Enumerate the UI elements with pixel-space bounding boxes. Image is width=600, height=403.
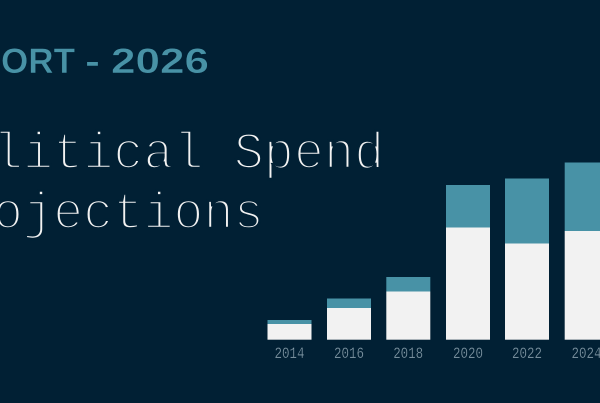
bar 2014 [268,320,312,340]
heading: report year [0,42,209,81]
bar 2024 [565,162,600,340]
axis labels: years: 2020 [453,345,483,363]
axis labels: years: 2018 [393,345,423,363]
heading: report year: - [85,42,100,81]
title [0,125,384,244]
axis labels: years: 2016 [334,345,364,363]
bar chart: spend by year [268,162,600,340]
heading: report year: 2026 [111,42,209,81]
axis labels: years: 2014 [274,345,304,363]
bar 2020 [446,185,490,340]
bar 2022 [505,178,549,340]
axis labels: years: 2022 [512,345,542,363]
bar 2016 [327,298,371,340]
axis labels: years [274,345,600,363]
bar 2018 [386,277,430,340]
